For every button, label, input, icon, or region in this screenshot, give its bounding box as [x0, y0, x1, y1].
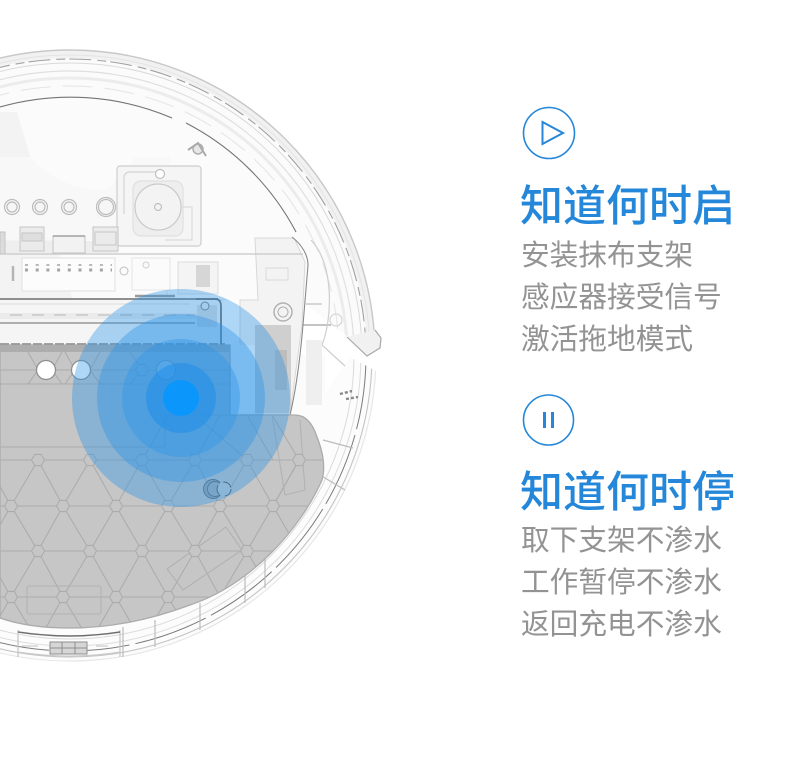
right side module: [240, 237, 345, 415]
text: stop line 1: 取下支架不渗水: [521, 525, 722, 557]
rim notch: [347, 330, 381, 356]
text: stop line 2: 工作暂停不渗水: [521, 567, 722, 599]
horizontal crossbar: [0, 253, 303, 255]
wheel pivot: [204, 480, 231, 498]
heading: when to start: 知道何时启: [520, 183, 735, 231]
tray hex nodes: [4, 454, 306, 603]
tray triangle pattern: [0, 352, 322, 627]
text: stop line 3: 返回充电不渗水: [521, 609, 722, 641]
tray openings: [36, 360, 176, 380]
play icon: [522, 106, 576, 160]
connector block: [13, 258, 225, 300]
mop tray panel: [0, 345, 340, 642]
heading: when to stop: 知道何时停: [520, 469, 735, 517]
sensor holes row: [4, 198, 116, 216]
hinges and clip row: [0, 227, 118, 254]
bottom bumper grille: [18, 630, 120, 657]
screw lug: [188, 143, 206, 156]
brush frame stripes: [0, 296, 225, 345]
text: start line 2: 感应器接受信号: [521, 282, 722, 314]
blue signal rings: [72, 289, 290, 507]
lower rim: [0, 359, 376, 662]
text: start line 3: 激活拖地模式: [521, 324, 693, 356]
white strip behind sensor: [231, 345, 255, 414]
inner dark arc: [0, 97, 296, 232]
upper rim: [0, 49, 375, 336]
shell body: [0, 112, 72, 298]
motor housing: [117, 166, 201, 246]
robot illustration: [0, 49, 382, 662]
pause icon: [522, 394, 574, 446]
text: start line 1: 安装抹布支架: [521, 240, 693, 272]
